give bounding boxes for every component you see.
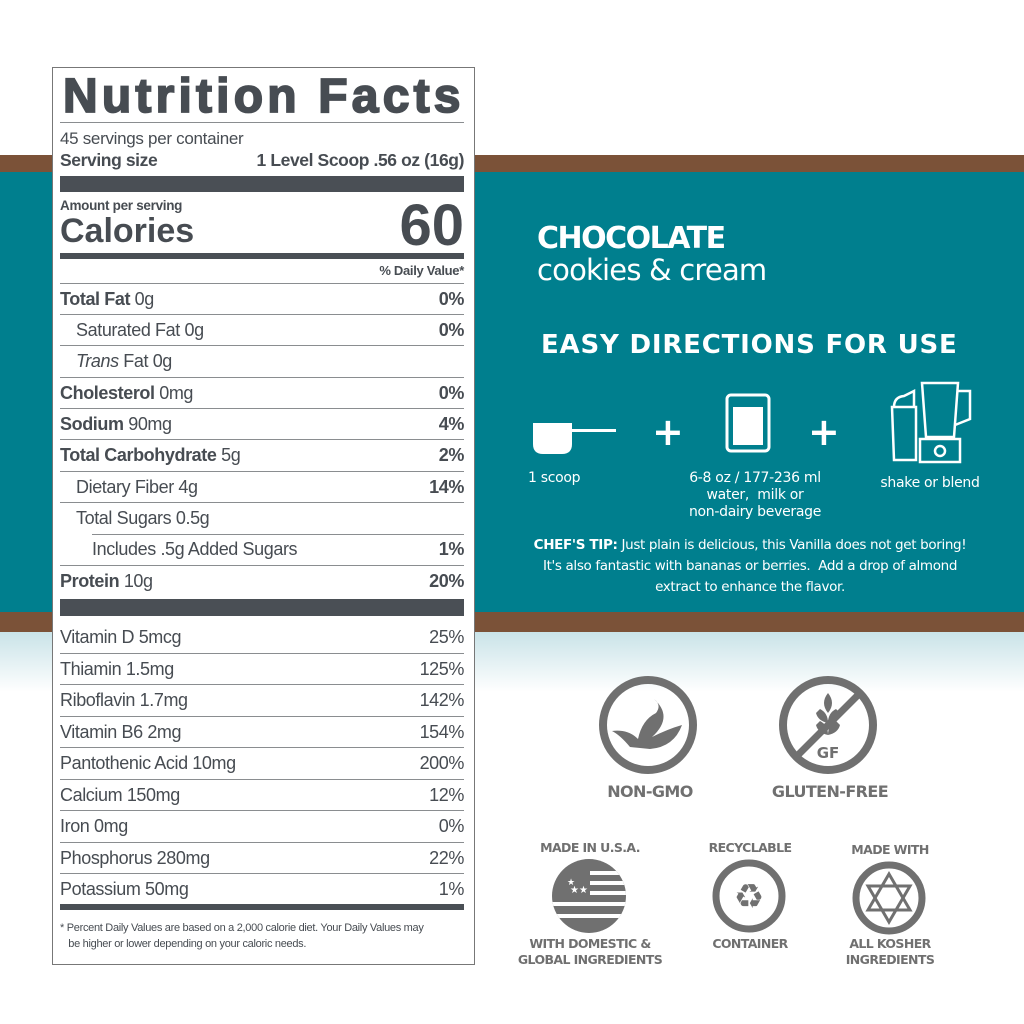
nutrition label: Total Sugars 0.5g (76, 508, 209, 528)
icon: plus: + (652, 410, 684, 454)
chef's tip (534, 537, 966, 595)
title: Nutrition Facts (63, 70, 465, 123)
nutrition label: % Daily Value* (379, 263, 464, 278)
nutrition label: Iron 0mg (60, 816, 128, 836)
vitamins: 25% (429, 627, 464, 647)
badge: non-gmo (599, 676, 697, 801)
footnote: be higher or lower depending on your caloric needs. (68, 938, 306, 950)
directions heading: EASY DIRECTIONS FOR USE (541, 330, 958, 360)
badge: made in usa: ★ (567, 877, 575, 887)
text: 6-8 oz / 177-236 ml (689, 470, 821, 486)
nutrition label: Pantothenic Acid 10mg (60, 753, 236, 773)
badge: kosher: ALL KOSHER (849, 936, 931, 951)
nutrition label: 1% (439, 539, 464, 559)
vitamins (60, 627, 464, 647)
chef's tip: CHEF'S TIP: Just plain is delicious, this Vanilla does not get boring! (534, 537, 966, 553)
nutrition label: 0% (439, 816, 464, 836)
badge: kosher: INGREDIENTS (846, 952, 934, 967)
badge: gluten-free: GLUTEN-FREE (772, 782, 888, 801)
icon: shaker and blender (890, 382, 972, 464)
nutrient rows: 0% (439, 289, 464, 309)
nutrition label: Potassium 50mg (60, 879, 188, 899)
nutrition label: Protein 10g (60, 571, 153, 591)
nutrition label: Sodium 90mg (60, 414, 172, 434)
nutrition label: 0% (439, 320, 464, 340)
nutrition label: 200% (420, 753, 464, 773)
nutrition label: 20% (429, 571, 464, 591)
text: water, milk or (706, 487, 804, 503)
footnote: * Percent Daily Values are based on a 2,000 calorie diet. Your Daily Values may (60, 922, 424, 934)
icon: scoop (533, 423, 616, 454)
badge: recyclable: RECYCLABLE (709, 840, 791, 855)
nutrition label: 1% (439, 879, 464, 899)
nutrition label: Cholesterol 0mg (60, 383, 193, 403)
servings: 45 servings per container (60, 129, 243, 148)
badge: recyclable: CONTAINER (712, 936, 788, 951)
badge: recyclable: ♻ (734, 878, 764, 916)
badge: gluten-free (772, 676, 888, 801)
badge: made in usa: MADE IN U.S.A. (540, 840, 640, 855)
icon: plus: + (808, 410, 840, 454)
nutrition label: Phosphorus 280mg (60, 848, 210, 868)
badge: made in usa (518, 840, 662, 967)
nutrition label: 125% (420, 659, 464, 679)
nutrition label: 60 (399, 193, 464, 258)
nutrition label: Saturated Fat 0g (76, 320, 204, 340)
badge: recyclable (709, 840, 792, 951)
badge: non-gmo: NON-GMO (607, 782, 693, 801)
nutrition label: 22% (429, 848, 464, 868)
badge: kosher: MADE WITH (851, 842, 929, 857)
badge: made in usa: WITH DOMESTIC & (529, 936, 651, 951)
nutrition label: Serving size (60, 150, 157, 170)
nutrition label: 2% (439, 445, 464, 465)
flavor heading: CHOCOLATE (537, 221, 725, 256)
nutrition label: Calcium 150mg (60, 785, 180, 805)
nutrition label: Thiamin 1.5mg (60, 659, 174, 679)
badge: gluten-free: GF (817, 744, 839, 762)
nutrition label: 4% (439, 414, 464, 434)
vitamins: Vitamin D 5mcg (60, 627, 181, 647)
nutrition label: Includes .5g Added Sugars (92, 539, 297, 559)
nutrition label: Dietary Fiber 4g (76, 477, 198, 497)
nutrition label: 1 Level Scoop .56 oz (16g) (257, 150, 464, 170)
nutrition label: 0% (439, 383, 464, 403)
nutrition label: Total Carbohydrate 5g (60, 445, 240, 465)
nutrition label (52, 67, 475, 965)
badge: made in usa: GLOBAL INGREDIENTS (518, 952, 662, 967)
chef's tip: extract to enhance the flavor. (655, 579, 845, 595)
footnote (60, 922, 424, 950)
text: shake or blend (880, 475, 980, 491)
chef's tip: It's also fantastic with bananas or berries. Add a drop of almond (543, 558, 957, 574)
nutrition label: Trans Fat 0g (76, 351, 172, 371)
nutrition label: 12% (429, 785, 464, 805)
nutrition label: 142% (420, 690, 464, 710)
icon: glass (726, 394, 770, 452)
nutrient rows (60, 283, 464, 314)
step labels: 1 scoop (528, 470, 580, 486)
nutrition label: 154% (420, 722, 464, 742)
badge: kosher (846, 842, 934, 967)
nutrition label: 14% (429, 477, 464, 497)
nutrition label: Calories (60, 212, 194, 250)
nutrition label: Vitamin B6 2mg (60, 722, 181, 742)
background bands (0, 155, 1024, 172)
badge: made in usa: ★★ (570, 885, 588, 896)
calories: Amount per serving (60, 198, 182, 213)
text: non-dairy beverage (689, 504, 821, 520)
nutrient rows: Total Fat 0g (60, 289, 154, 309)
text: cookies & cream (537, 253, 766, 287)
nutrition label: Riboflavin 1.7mg (60, 690, 188, 710)
